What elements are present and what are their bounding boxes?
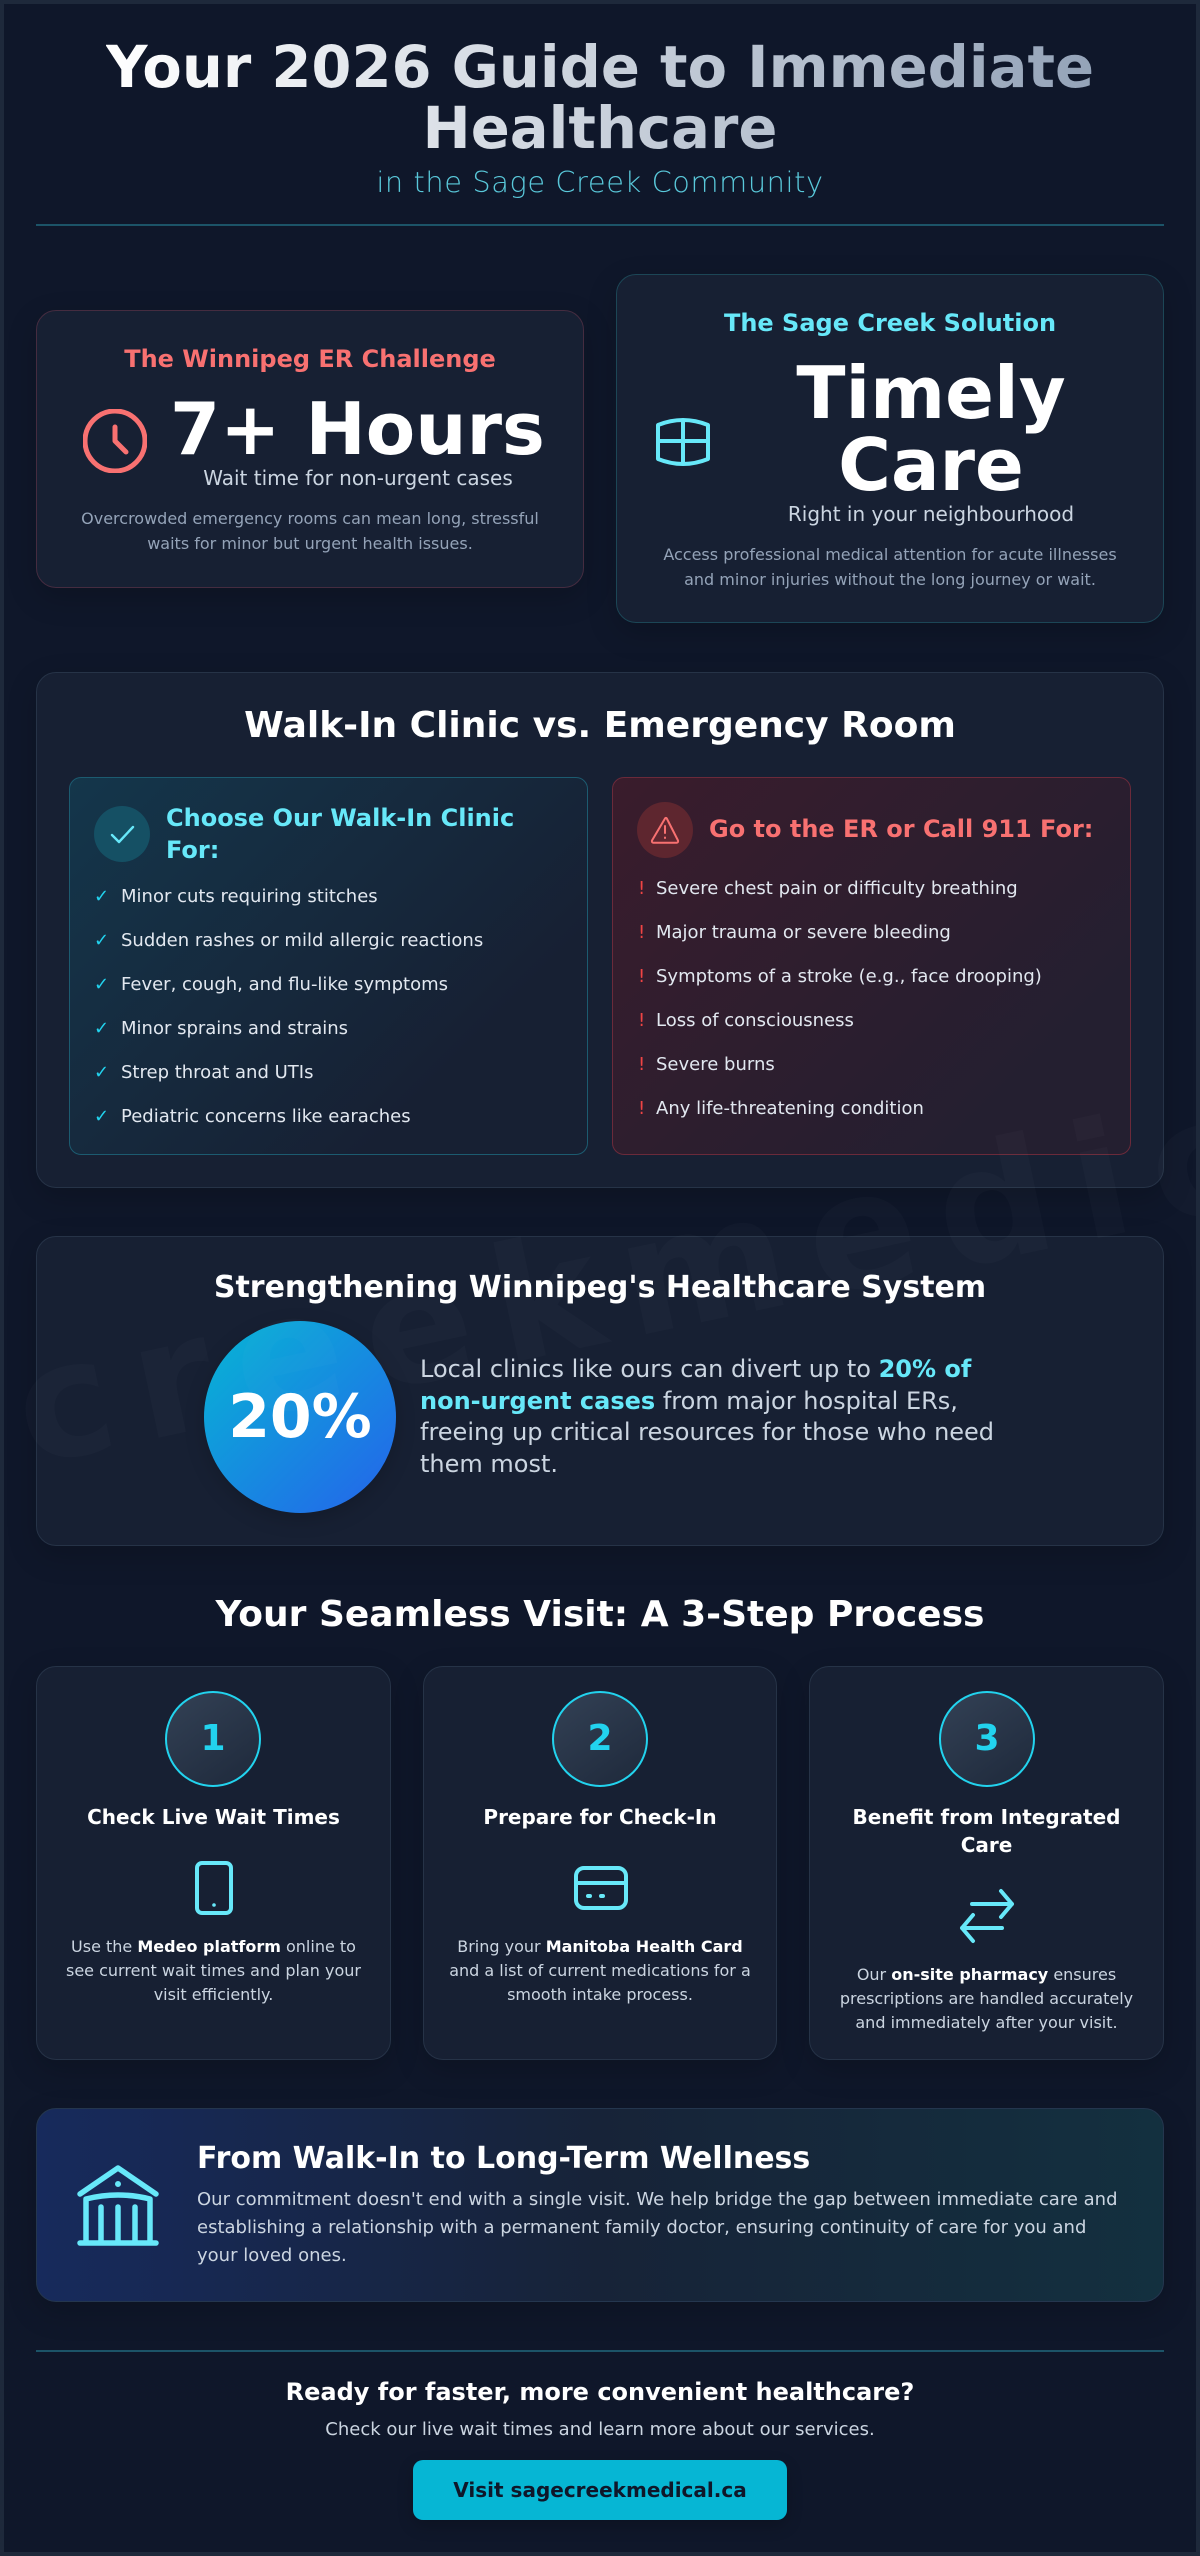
list: ER conditions: Major trauma or severe bleeding (656, 922, 951, 943)
list: walk-in conditions: Strep throat and UTIs (121, 1062, 313, 1083)
step heading 2: Prepare for Check-In (483, 1805, 717, 1829)
step number 3 (939, 1691, 1035, 1787)
description: your loved ones. (197, 2245, 347, 2266)
heading: strengthening: Strengthening Winnipeg's Healthcare System (214, 1270, 986, 1305)
list: ER conditions: ! (638, 878, 645, 899)
stat: 7+ hours: 7+ Hours (170, 387, 545, 471)
CTA text: Check our live wait times and learn more about our services. (325, 2419, 875, 2440)
list: walk-in conditions: ✓ (94, 886, 109, 907)
list: walk-in conditions: Minor sprains and strains (121, 1018, 348, 1039)
stat caption: Right in your neighbourhood (788, 502, 1074, 526)
icon: warning circle (637, 802, 693, 858)
step text 2: smooth intake process. (507, 1985, 693, 2004)
heading: ER challenge: The Winnipeg ER Challenge (124, 345, 496, 373)
icon: card (574, 1866, 628, 1910)
list: ER conditions: Any life-threatening condition (656, 1098, 924, 1119)
icon: building (77, 2165, 159, 2246)
list: ER conditions: ! (638, 1098, 645, 1119)
step text 2: and a list of current medications for a (449, 1961, 751, 1980)
description: freeing up critical resources for those who need (420, 1418, 994, 1446)
heading: choose walk-in clinic: Choose Our Walk-In Clinic (166, 804, 514, 832)
step number 1 (165, 1691, 261, 1787)
icon: globe (656, 418, 710, 466)
stat caption: Wait time for non-urgent cases (203, 466, 513, 490)
step text 2: Bring your Manitoba Health Card (457, 1937, 743, 1956)
subtitle: in the Sage Creek Community (376, 165, 824, 199)
icon: phone (195, 1861, 233, 1915)
description: Overcrowded emergency rooms can mean long, stressful (81, 509, 539, 528)
description: non-urgent cases from major hospital ERs, (420, 1386, 958, 1414)
description (81, 509, 539, 553)
description: establishing a relationship with a permanent family doctor, ensuring continuity of care for you and (197, 2217, 1086, 2238)
list: ER conditions (638, 878, 1042, 1119)
step text 3: and immediately after your visit. (855, 2013, 1118, 2032)
step text 3: Our on-site pharmacy ensures (857, 1965, 1116, 1984)
panel: step 2 (423, 1666, 777, 2060)
CTA button: Visit sagecreekmedical.ca (453, 2478, 747, 2502)
step text 3 (840, 1965, 1133, 2032)
stat: timely care: Timely (796, 351, 1066, 435)
description: Access professional medical attention for acute illnesses (663, 545, 1117, 564)
step heading 3: Care (961, 1833, 1012, 1857)
description: them most. (420, 1450, 558, 1478)
panel: walk-in vs ER comparison (36, 672, 1164, 1188)
list: ER conditions: Severe chest pain or difficulty breathing (656, 878, 1018, 899)
step heading 1: Check Live Wait Times (87, 1805, 340, 1829)
step text 2 (449, 1937, 751, 2004)
list: walk-in conditions (94, 886, 483, 1127)
step text 1: visit efficiently. (154, 1985, 273, 2004)
heading: choose walk-in clinic (166, 804, 514, 864)
list: ER conditions: ! (638, 922, 645, 943)
step number 2: 2 (587, 1718, 613, 1759)
list: ER conditions: Severe burns (656, 1054, 775, 1075)
list: walk-in conditions: ✓ (94, 1018, 109, 1039)
list: walk-in conditions: ✓ (94, 1062, 109, 1083)
heading: comparison: Walk-In Clinic vs. Emergency Room (244, 705, 956, 746)
list: walk-in conditions: Pediatric concerns like earaches (121, 1106, 411, 1127)
step number 1: 1 (200, 1718, 226, 1759)
list: walk-in conditions: Fever, cough, and flu-like symptoms (121, 974, 448, 995)
description: waits for minor but urgent health issues. (147, 534, 473, 553)
list: ER conditions: ! (638, 1010, 645, 1031)
stat: timely care: Care (838, 423, 1024, 507)
stat: timely care (796, 351, 1066, 507)
CTA button (413, 2460, 787, 2520)
icon: exchange arrows (960, 1888, 1014, 1944)
step number 3: 3 (974, 1718, 1000, 1759)
step number 2 (552, 1691, 648, 1787)
icon: clock (83, 409, 147, 473)
list: walk-in conditions: ✓ (94, 974, 109, 995)
step heading 3 (852, 1805, 1120, 1857)
description: Our commitment doesn't end with a single visit. We help bridge the gap between immediate care and (197, 2189, 1118, 2210)
step heading 3: Benefit from Integrated (852, 1805, 1120, 1829)
step text 1: Use the Medeo platform online to (71, 1937, 356, 1956)
list: ER conditions: ! (638, 966, 645, 987)
description (420, 1355, 994, 1478)
panel: step 1 (36, 1666, 391, 2060)
description (197, 2189, 1118, 2266)
title: Healthcare (423, 95, 777, 162)
heading: 3-step process: Your Seamless Visit: A 3-Step Process (216, 1594, 984, 1635)
panel: walk-in clinic list (69, 777, 588, 1155)
list: walk-in conditions: Sudden rashes or mild allergic reactions (121, 930, 483, 951)
panel: step 3 (809, 1666, 1164, 2060)
heading: choose walk-in clinic: For: (166, 836, 219, 864)
title (106, 34, 1094, 162)
heading: go to ER: Go to the ER or Call 911 For: (709, 815, 1093, 843)
description: Local clinics like ours can divert up to 20% of (420, 1355, 971, 1383)
step text 1: see current wait times and plan your (66, 1961, 361, 1980)
list: walk-in conditions: ✓ (94, 930, 109, 951)
step text 1 (66, 1937, 361, 2004)
description: and minor injuries without the long journey or wait. (684, 570, 1096, 589)
list: walk-in conditions: Minor cuts requiring stitches (121, 886, 378, 907)
stat circle: 20% (204, 1321, 396, 1513)
panel: winnipeg ER challenge (36, 310, 584, 588)
list: walk-in conditions: ✓ (94, 1106, 109, 1127)
divider (36, 224, 1164, 226)
list: ER conditions: ! (638, 1054, 645, 1075)
CTA heading: Ready for faster, more convenient healthcare? (286, 2378, 914, 2406)
divider (36, 2350, 1164, 2352)
list: ER conditions: Symptoms of a stroke (e.g., face drooping) (656, 966, 1042, 987)
title: Your 2026 Guide to Immediate (106, 34, 1094, 101)
heading: sage creek solution: The Sage Creek Solution (724, 309, 1056, 337)
stat circle: 20%: 20% (228, 1382, 372, 1452)
list: ER conditions: Loss of consciousness (656, 1010, 854, 1031)
panel: strengthening healthcare system (36, 1236, 1164, 1546)
icon: check circle (94, 806, 150, 862)
description (663, 545, 1117, 589)
panel: sage creek solution (616, 274, 1164, 623)
panel: long-term wellness (36, 2108, 1164, 2302)
panel: emergency room list (612, 777, 1131, 1155)
step text 3: prescriptions are handled accurately (840, 1989, 1133, 2008)
heading: wellness: From Walk-In to Long-Term Wellness (197, 2141, 810, 2176)
